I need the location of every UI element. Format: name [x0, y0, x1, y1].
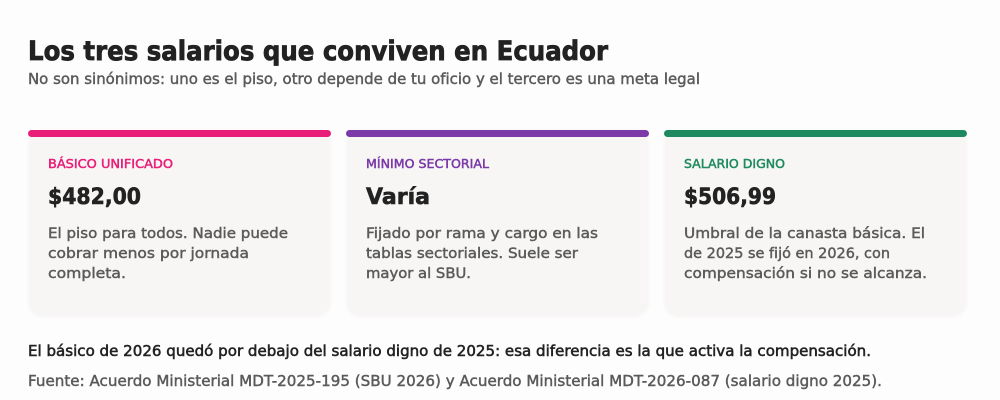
text: básico description	[48, 226, 288, 282]
panel: mínimo sectorial	[346, 130, 649, 317]
text: digno description: de 2025 se fijó en 2026, con	[684, 246, 890, 262]
value: 482: $482,00	[48, 185, 141, 210]
panel: básico unificado	[28, 130, 331, 317]
text: digno description	[684, 226, 927, 282]
text: básico description: cobrar menos por jornada	[48, 246, 249, 262]
text: digno description: compensación si no se alcanza.	[684, 266, 927, 282]
text: básico description: completa.	[48, 266, 126, 282]
text: digno description: Umbral de la canasta básica. El	[684, 226, 925, 242]
takeaway: El básico de 2026 quedó por debajo del salario digno de 2025: esa diferencia es la que activa la compensación.	[28, 342, 871, 360]
text: mínimo description: tablas sectoriales. Suele ser	[366, 246, 578, 262]
source: Fuente: Acuerdo Ministerial MDT-2025-195 (SBU 2026) y Acuerdo Ministerial MDT-2026-087 (salario digno 2025).	[28, 372, 882, 390]
value: 506: $506,99	[684, 185, 776, 210]
text: básico description: El piso para todos. Nadie puede	[48, 226, 288, 242]
text: mínimo description: mayor al SBU.	[366, 266, 471, 282]
label: salario digno: SALARIO DIGNO	[684, 156, 785, 171]
label: básico unificado: BÁSICO UNIFICADO	[48, 156, 173, 171]
panel: salario digno	[664, 130, 967, 317]
title: Los tres salarios que conviven en Ecuador	[28, 36, 609, 67]
label: mínimo sectorial: MÍNIMO SECTORIAL	[366, 156, 489, 171]
text: mínimo description: Fijado por rama y cargo en las	[366, 226, 598, 242]
value: varía: Varía	[366, 185, 430, 210]
text: mínimo description	[366, 226, 598, 282]
subtitle: No son sinónimos: uno es el piso, otro depende de tu oficio y el tercero es una meta legal	[28, 70, 700, 88]
